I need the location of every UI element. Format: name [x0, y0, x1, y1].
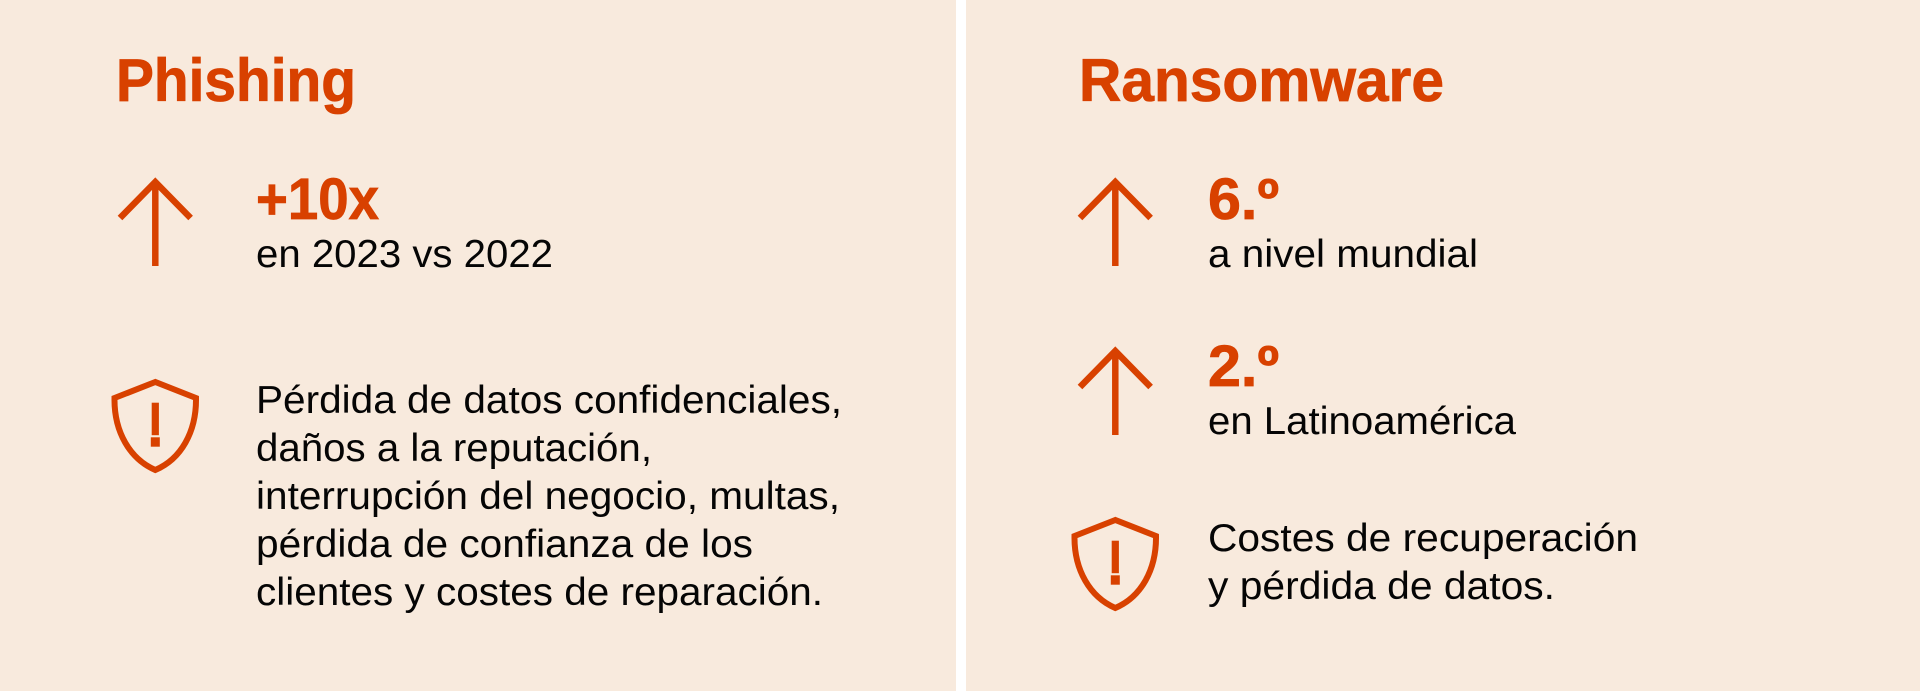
text block: phishing consequences: interrupción del negocio, multas, — [256, 475, 840, 518]
heading: Phishing: Phishing — [116, 47, 356, 114]
stat: 2.º: 2.º — [1208, 334, 1279, 399]
icon: up arrow — [1080, 351, 1151, 435]
heading: Ransomware: Ransomware — [1079, 47, 1444, 114]
icon: up arrow — [1080, 182, 1151, 266]
text block: phishing consequences: pérdida de confianza de los — [256, 523, 753, 566]
icon: warning shield — [114, 382, 196, 470]
stat: 6.º: 6.º — [1208, 167, 1279, 232]
panel: ransomware — [966, 0, 1920, 691]
text block: ransomware consequences — [1208, 517, 1638, 608]
stat caption: en 2023 vs 2022 — [256, 233, 553, 276]
text block: phishing consequences: clientes y costes de reparación. — [256, 571, 823, 614]
panel: phishing — [0, 0, 956, 691]
stat caption: a nivel mundial — [1208, 233, 1478, 276]
stat: +10x: +10x — [256, 167, 379, 232]
icon: warning shield — [1074, 520, 1156, 608]
text block: ransomware consequences: Costes de recuperación — [1208, 517, 1638, 560]
text block: ransomware consequences: y pérdida de datos. — [1208, 565, 1555, 608]
stat caption: en Latinoamérica — [1208, 400, 1517, 443]
text block: phishing consequences: Pérdida de datos confidenciales, — [256, 379, 842, 422]
icon: up arrow — [120, 182, 191, 266]
text block: phishing consequences: daños a la reputación, — [256, 427, 652, 470]
text block: phishing consequences — [256, 379, 842, 614]
